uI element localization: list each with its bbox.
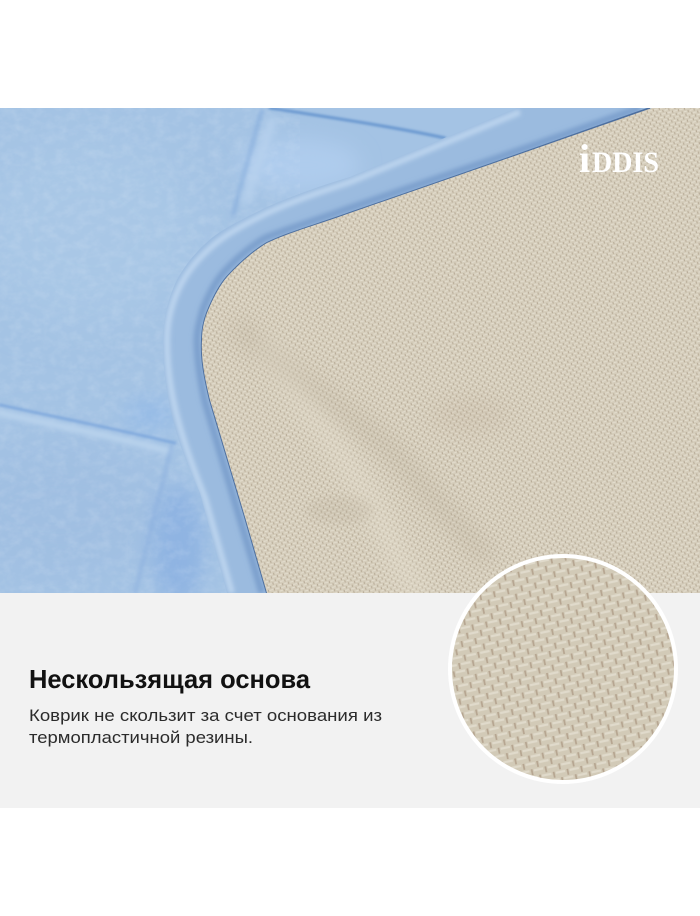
piping highlight (167, 112, 520, 593)
beige rubber backing (190, 100, 700, 600)
heading: Нескользящая основа (29, 664, 311, 694)
blue plush surface (0, 108, 700, 605)
quilted seams (0, 108, 445, 593)
product photo: mat corner (0, 100, 700, 605)
brand logo: IDDIS: DDIS (592, 146, 659, 179)
brand logo: IDDIS (580, 144, 658, 172)
description text: Коврик не скользит за счет основания из (29, 706, 382, 725)
infographic canvas (0, 108, 700, 808)
bottom panel background (0, 593, 700, 808)
fold highlight and stains (262, 340, 420, 600)
blue piping edge (150, 108, 660, 593)
brand logo: IDDIS: i (579, 136, 590, 181)
piping inner shade (197, 108, 640, 593)
description text (29, 706, 382, 747)
description text: термопластичной резины. (29, 728, 253, 747)
detail circle: weave close-up (445, 550, 681, 786)
piping inner shadow (202, 108, 650, 593)
